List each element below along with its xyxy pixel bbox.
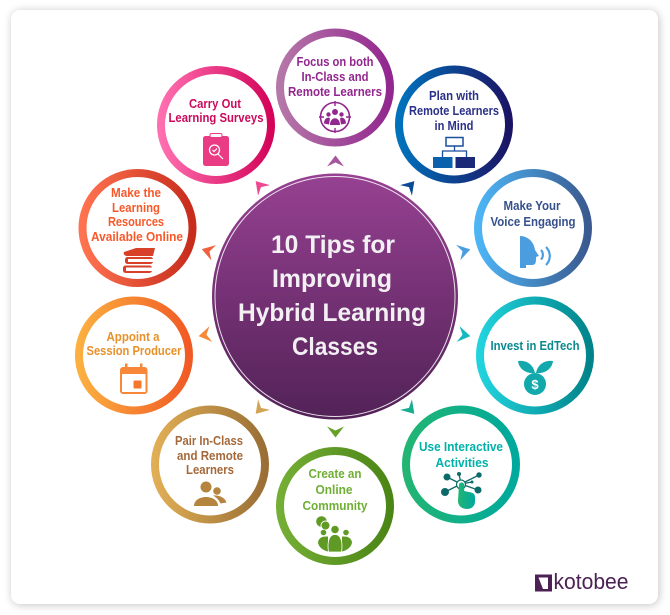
heading: pair: Learners [186, 463, 234, 477]
icon: community people [316, 516, 352, 552]
panel: use interactive activities [406, 410, 516, 520]
icon: two people [194, 482, 226, 506]
heading: resources: Available Online [91, 230, 183, 244]
heading: resources: Make the [111, 186, 161, 200]
heading: edtech: Invest in EdTech [490, 339, 580, 353]
heading: voice: Make Your [504, 199, 561, 213]
heading: resources [91, 186, 183, 244]
heading: voice: Voice Engaging [490, 215, 576, 229]
heading: appoint: Appoint a [106, 330, 160, 344]
panel: focus on both learners [280, 32, 390, 142]
heading: interactive: Use Interactive [419, 440, 503, 454]
heading: interactive: Activities [436, 456, 488, 470]
arrow: appoint [197, 326, 212, 344]
arrow: pair [250, 399, 270, 419]
heading: surveys [168, 97, 264, 125]
title text: 10 Tips for [271, 231, 395, 259]
heading: surveys: Carry Out [189, 97, 242, 111]
heading: plan: Plan with [429, 89, 479, 103]
heading: focus: Focus on both [296, 55, 374, 69]
arrow: voice [456, 242, 472, 260]
icon: speaking head [520, 236, 550, 268]
heading: plan: Remote Learners [409, 104, 499, 118]
panel: plan with remote learners [399, 70, 509, 180]
heading: community: Create an [308, 467, 362, 481]
icon: org chart [433, 138, 475, 168]
arrow: invest [457, 326, 472, 344]
icon: money plant: $ [531, 377, 539, 392]
central circle: title [212, 174, 458, 420]
icon: calendar [120, 364, 148, 394]
heading: appoint: Session Producer [86, 344, 182, 358]
heading: plan [409, 89, 499, 133]
arrow: resources [199, 241, 216, 260]
arrow: interactive [400, 399, 420, 419]
heading: pair [175, 434, 243, 477]
heading: focus: In-Class and [302, 70, 368, 84]
title text: Hybrid Learning [238, 299, 426, 327]
title text: Classes [292, 333, 378, 361]
panel: pair in-class and remote learners [155, 410, 265, 520]
heading: pair: and Remote [177, 449, 243, 463]
panel: carry out learning surveys [161, 70, 271, 180]
heading: surveys: Learning Surveys [168, 111, 264, 125]
panel: invest in edtech [480, 300, 590, 410]
arrow: top [327, 156, 344, 166]
panel: make your voice engaging [478, 173, 588, 283]
panel: create an online community [280, 451, 390, 561]
arrow: surveys [250, 176, 270, 196]
icon: target group [319, 101, 351, 133]
heading: community: Community [302, 499, 368, 513]
heading: community [302, 467, 368, 513]
logo: kotobee: kotobee [554, 569, 628, 594]
icon: stack of books [123, 248, 155, 273]
heading: plan: in Mind [434, 119, 474, 133]
heading: focus [288, 55, 382, 99]
heading: resources: Learning [112, 201, 160, 215]
heading: appoint [86, 330, 182, 358]
panel: make the learning resources available online [82, 173, 192, 283]
heading: interactive [419, 440, 503, 470]
icon: touch network [441, 472, 482, 509]
heading: focus: Remote Learners [288, 85, 382, 99]
arrow: plan [400, 176, 420, 196]
icon: clipboard with magnifier [203, 134, 229, 166]
title text: Improving [272, 265, 392, 293]
heading: pair: Pair In-Class [175, 434, 243, 448]
panel: appoint a session producer [79, 300, 189, 410]
heading: voice [490, 199, 576, 229]
heading: community: Online [316, 483, 352, 497]
heading: resources: Resources [108, 215, 164, 229]
arrow: community [327, 426, 344, 438]
title text [238, 231, 426, 361]
